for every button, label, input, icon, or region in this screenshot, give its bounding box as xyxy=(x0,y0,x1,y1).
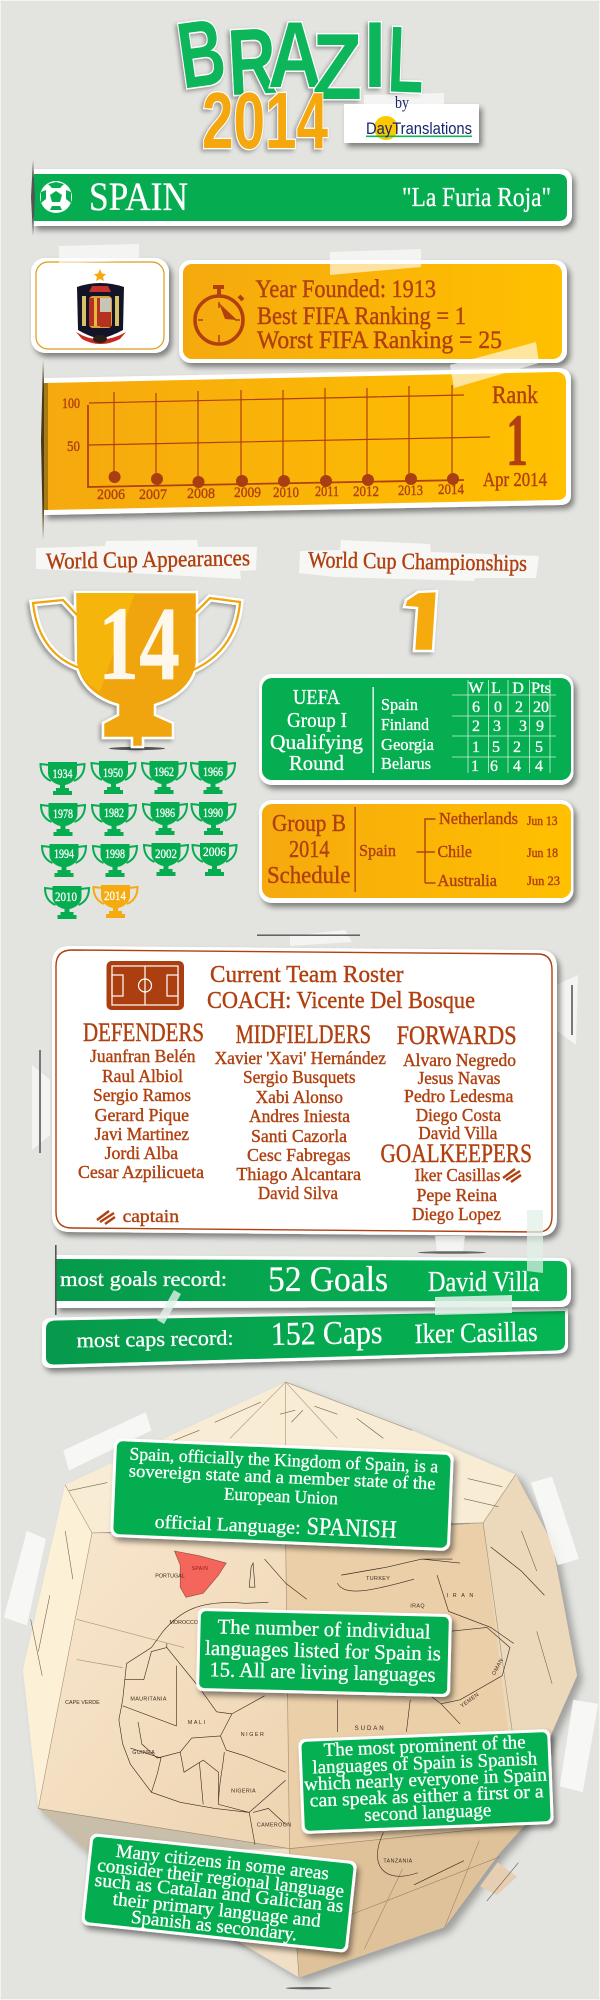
schedule title: 2014 xyxy=(289,837,330,863)
title: Brazil xyxy=(171,0,426,119)
panel: founding and FIFA rankings xyxy=(179,249,567,363)
forwards column: Pedro Ledesma xyxy=(404,1086,513,1106)
tapes on globe xyxy=(4,1412,598,1901)
banner: most goals record xyxy=(55,1245,571,1315)
chart axis labels: 2006 xyxy=(97,487,125,503)
trophies: tournament years xyxy=(40,761,236,919)
defenders column: Juanfran Belén xyxy=(90,1046,196,1066)
panel: current team roster xyxy=(52,946,557,1236)
qualifying round title: Qualifying xyxy=(270,730,364,754)
trophy 2002: 2002 xyxy=(155,846,177,861)
forwards column xyxy=(397,1021,517,1143)
midfielders column: Thiago Alcantara xyxy=(236,1164,361,1184)
current rank: 1 xyxy=(506,400,528,482)
roster heading: Current Team Roster xyxy=(210,962,404,988)
opponents and dates: Australia xyxy=(438,871,497,890)
forwards column: Diego Costa xyxy=(416,1105,501,1125)
trophy 1986: 1986 xyxy=(155,805,175,820)
value: 152 Caps xyxy=(271,1315,383,1353)
results table: 5 xyxy=(535,739,543,756)
trophy 1990 xyxy=(192,802,236,835)
callout: number of languages: languages listed for Spain is xyxy=(205,1636,441,1665)
qualifying round title xyxy=(270,685,364,775)
results table xyxy=(468,680,551,775)
country labels: IRAQ xyxy=(410,1603,425,1609)
text: worst ranking: Worst FIFA Ranking = 25 xyxy=(257,327,502,354)
callout: Spain overview: European Union xyxy=(224,1484,338,1508)
icon: large trophy with 14 appearances xyxy=(33,585,240,750)
callout: regional languages: Spanish as secondary. xyxy=(130,1907,298,1945)
callout: Spain overview: official Language: xyxy=(154,1512,301,1539)
callout: regional languages: consider their regional language xyxy=(96,1855,345,1902)
chart axis labels: 2014 xyxy=(438,482,464,498)
defenders column: Sergio Ramos xyxy=(93,1085,191,1105)
opponents and dates xyxy=(438,809,560,890)
trophy 1982 xyxy=(92,803,136,836)
trophy 1982: 1982 xyxy=(104,805,124,820)
country labels: SUDAN xyxy=(355,1725,386,1732)
trophy 2002 xyxy=(144,843,188,876)
defenders column: Jordi Alba xyxy=(105,1143,178,1163)
icon: soccer ball xyxy=(40,181,72,213)
callout: Spain overview: Spain, officially the Kingdom of Spain, is a xyxy=(129,1444,439,1477)
callout: regional languages: Many citizens in some areas xyxy=(115,1841,330,1884)
country labels: MALI xyxy=(188,1720,207,1726)
goalkeepers column: Pepe Reina xyxy=(416,1185,497,1205)
trophy 1986 xyxy=(143,802,187,835)
trophy 1966: 1966 xyxy=(203,764,223,779)
results table: 9 xyxy=(536,718,544,735)
callout: most prominent language: which nearly everyone in Spain xyxy=(304,1765,548,1795)
callout: regional languages xyxy=(81,1833,357,1953)
text: year founded: Year Founded: 1913 xyxy=(256,276,436,303)
tape connector above records xyxy=(418,1236,486,1254)
current rank: Apr 2014 xyxy=(483,469,547,491)
country labels: CAMEROON xyxy=(257,1822,292,1829)
results table: 3 xyxy=(519,718,527,735)
legend: captain xyxy=(97,1206,179,1226)
forwards column: Jesus Navas xyxy=(418,1068,500,1088)
defenders column: Javi Martinez xyxy=(95,1124,189,1144)
team names: Belarus xyxy=(381,754,431,773)
results table: 5 xyxy=(492,739,500,756)
midfielders column: Andres Iniesta xyxy=(249,1106,350,1126)
schedule title: Group B xyxy=(272,811,346,837)
text: best ranking: Best FIFA Ranking = 1 xyxy=(257,303,466,330)
midfielders column: Sergio Busquets xyxy=(243,1067,356,1087)
results table: 2 xyxy=(513,739,521,756)
chart axis labels: 2009 xyxy=(234,485,261,501)
title: Brazil: Z xyxy=(312,14,362,119)
trophy 1990: 1990 xyxy=(203,805,223,820)
trophy 1950 xyxy=(92,761,136,794)
midfielders column: MIDFIELDERS xyxy=(236,1020,371,1049)
icon: captain mark on Casillas xyxy=(503,1169,521,1182)
trophy 1994 xyxy=(42,844,86,877)
trophy 2006 xyxy=(192,843,236,876)
country labels: NIGER xyxy=(241,1732,265,1738)
title: 2014: 2014 xyxy=(202,76,328,165)
country labels: CAPE VERDE xyxy=(65,1700,100,1706)
callout: most prominent language: can speak as either a first or a xyxy=(309,1781,545,1812)
midfielders column: Santi Cazorla xyxy=(251,1126,347,1146)
trophy 1998: 1998 xyxy=(105,846,125,861)
tapes on record banners xyxy=(157,1210,543,1324)
bracket xyxy=(416,819,436,883)
callout: Spain overview xyxy=(110,1438,454,1551)
results table: W xyxy=(468,680,484,697)
heading: World Cup Appearances: World Cup Appearances xyxy=(46,545,250,574)
schedule title: Schedule xyxy=(267,863,350,889)
opponents and dates: Jun 23 xyxy=(527,873,560,888)
defenders column: Cesar Azpilicueta xyxy=(78,1162,204,1182)
team names: Georgia xyxy=(381,735,435,754)
callout: regional languages: such as Catalan and Galician as xyxy=(94,1870,344,1917)
midfielders column: David Silva xyxy=(258,1183,338,1203)
title: Brazil: I xyxy=(364,2,386,107)
title: Brazil: A xyxy=(268,2,322,107)
defenders column: Raul Albiol xyxy=(102,1066,183,1086)
midfielders column: Xavier 'Xavi' Hernández xyxy=(215,1048,386,1068)
results table: Pts xyxy=(531,680,551,697)
chart axis labels: 2012 xyxy=(353,484,379,500)
label: most caps record: xyxy=(76,1326,234,1352)
chart axis labels: 50 xyxy=(67,439,80,455)
team names: Finland xyxy=(381,715,430,734)
trophy 2014 xyxy=(94,885,138,918)
country labels: SPAIN xyxy=(192,1566,208,1572)
country labels: GUINEA xyxy=(132,1750,155,1756)
qualifying round title: Round xyxy=(289,751,344,775)
trophy 1998 xyxy=(93,844,137,877)
chart axis labels: 100 xyxy=(62,396,80,412)
callout: regional languages: their primary language and xyxy=(112,1889,322,1932)
trophy 1950: 1950 xyxy=(103,765,123,780)
team names: Spain xyxy=(381,695,418,714)
goalkeepers column: Diego Lopez xyxy=(412,1204,501,1224)
schedule title xyxy=(267,811,350,889)
country labels: PORTUGAL xyxy=(155,1573,185,1580)
heading: World Cup Championships: World Cup Championships xyxy=(308,547,527,576)
chart axis labels: 2008 xyxy=(187,486,215,502)
panel: Group B schedule xyxy=(259,800,574,903)
results table: L xyxy=(491,680,501,697)
results table: 3 xyxy=(493,718,501,735)
icon: large trophy with 14 appearances: 14 xyxy=(98,585,180,702)
goalkeepers column xyxy=(380,1139,532,1224)
icon: Spain crest xyxy=(76,283,126,344)
callout: Spain overview: sovereign state and a member state of the xyxy=(128,1461,436,1493)
logo: Day Translations: DayTranslations xyxy=(366,119,472,138)
tapes around roster panel xyxy=(32,930,578,1153)
heading: World Cup Appearances xyxy=(36,540,257,579)
country labels xyxy=(65,1566,505,1865)
callout: Spain overview: SPANISH xyxy=(306,1513,397,1544)
results table: 1 xyxy=(471,758,479,775)
forwards column: David Villa xyxy=(418,1123,497,1143)
results table: 2 xyxy=(472,718,480,735)
midfielders column: Xabi Alonso xyxy=(256,1087,343,1107)
team names xyxy=(381,695,435,773)
label: most goals record: xyxy=(60,1267,227,1291)
title: Brazil: R xyxy=(225,8,279,115)
nickname: "La Furia Roja" xyxy=(402,182,551,212)
panel: FIFA rank chart xyxy=(41,342,571,540)
trophy 1934: 1934 xyxy=(52,766,73,781)
title: Brazil: L xyxy=(386,6,426,113)
coach: COACH: Vicente Del Bosque xyxy=(207,988,475,1014)
logo: Day Translations: by xyxy=(395,93,409,112)
trophy 2014: 2014 xyxy=(104,888,126,903)
chart axis labels: 2011 xyxy=(315,484,339,500)
team name: SPAIN xyxy=(89,174,188,219)
callout: most prominent language: second language xyxy=(364,1800,492,1826)
defenders column: Gerard Pique xyxy=(95,1105,189,1125)
legend: captain: captain xyxy=(123,1206,179,1226)
qualifying round title: Group I xyxy=(287,708,347,732)
results table: 6 xyxy=(490,758,498,775)
icon: football pitch xyxy=(106,961,184,1010)
forwards column: FORWARDS xyxy=(397,1021,517,1050)
results table: 4 xyxy=(513,758,521,775)
holder: David Villa xyxy=(428,1267,540,1298)
trophy 1962 xyxy=(142,761,186,794)
panel: crest card xyxy=(31,244,169,353)
qualifying round title: UEFA xyxy=(293,685,341,709)
icon: large 1 championship xyxy=(404,591,437,651)
banner: Spain team name xyxy=(31,160,572,236)
trophy 2006: 2006 xyxy=(203,844,226,859)
chart axis labels: 2010 xyxy=(273,485,299,501)
callout: most prominent language xyxy=(298,1729,554,1834)
results table: 0 xyxy=(494,699,502,716)
results table: 6 xyxy=(472,699,480,716)
results table: 1 xyxy=(472,739,480,756)
results table: 20 xyxy=(533,699,549,716)
defenders column xyxy=(78,1018,204,1182)
callout: number of languages: The number of individual xyxy=(217,1614,431,1644)
team: Spain xyxy=(359,841,396,860)
opponents and dates: Netherlands xyxy=(439,809,518,828)
midfielders column: Cesc Fabregas xyxy=(247,1145,351,1165)
chart axis labels xyxy=(62,396,464,503)
midfielders column xyxy=(215,1020,386,1203)
current rank xyxy=(483,382,547,491)
chart data points xyxy=(109,471,459,488)
trophy 1966 xyxy=(191,761,235,794)
current rank: Rank xyxy=(492,382,538,409)
country labels: MAURITANIA xyxy=(130,1697,167,1703)
opponents and dates: Chile xyxy=(438,842,472,861)
goalkeepers column: Iker Casillas xyxy=(415,1165,500,1185)
chart axis labels: 2013 xyxy=(398,483,423,499)
banner: most caps record xyxy=(42,1308,568,1368)
trophy 1978 xyxy=(41,803,85,836)
callout: number of languages xyxy=(196,1608,452,1697)
opponents and dates: Jun 13 xyxy=(527,813,558,828)
icon: stopwatch xyxy=(195,287,243,344)
callout: number of languages: 15. All are living languages xyxy=(209,1657,436,1687)
chart axis labels: 2007 xyxy=(139,487,167,503)
icon: star xyxy=(94,269,106,281)
goalkeepers column: GOALKEEPERS xyxy=(380,1139,532,1168)
results table: 2 xyxy=(515,699,523,716)
trophy 1962: 1962 xyxy=(154,764,174,779)
country labels: OMAN xyxy=(491,1658,505,1677)
results table: 4 xyxy=(535,758,543,775)
trophy 2010 xyxy=(45,886,89,919)
opponents and dates: Jun 18 xyxy=(527,845,558,860)
country labels: YEMEN xyxy=(460,1692,480,1710)
map: faceted paper globe xyxy=(4,1382,598,1989)
country labels: NIGERIA xyxy=(231,1788,256,1794)
defenders column: DEFENDERS xyxy=(83,1018,204,1047)
trophy 2010: 2010 xyxy=(55,889,77,904)
value: 52 Goals xyxy=(268,1259,388,1299)
country labels: TANZANIA xyxy=(383,1859,413,1865)
logo: Day Translations xyxy=(344,93,479,143)
highlighted country: Spain xyxy=(174,1551,226,1597)
country labels: IRAN xyxy=(447,1593,478,1599)
trophy 1934 xyxy=(40,762,84,795)
trophy 1978: 1978 xyxy=(53,806,73,821)
callout: most prominent language: languages of Spain is Spanish xyxy=(312,1749,538,1779)
holder: Iker Casillas xyxy=(414,1317,538,1350)
forwards column: Alvaro Negredo xyxy=(403,1050,516,1070)
panel: UEFA qualifying table xyxy=(259,674,574,785)
callout: most prominent language: The most prominent of the xyxy=(323,1732,526,1761)
country labels: TURKEY xyxy=(366,1576,390,1582)
trophy 1994: 1994 xyxy=(54,846,74,861)
heading: World Cup Championships xyxy=(299,540,539,581)
country labels: MOROCCO xyxy=(169,1620,199,1626)
results table: D xyxy=(512,680,524,697)
chart: yearly ranking grid xyxy=(88,385,490,487)
